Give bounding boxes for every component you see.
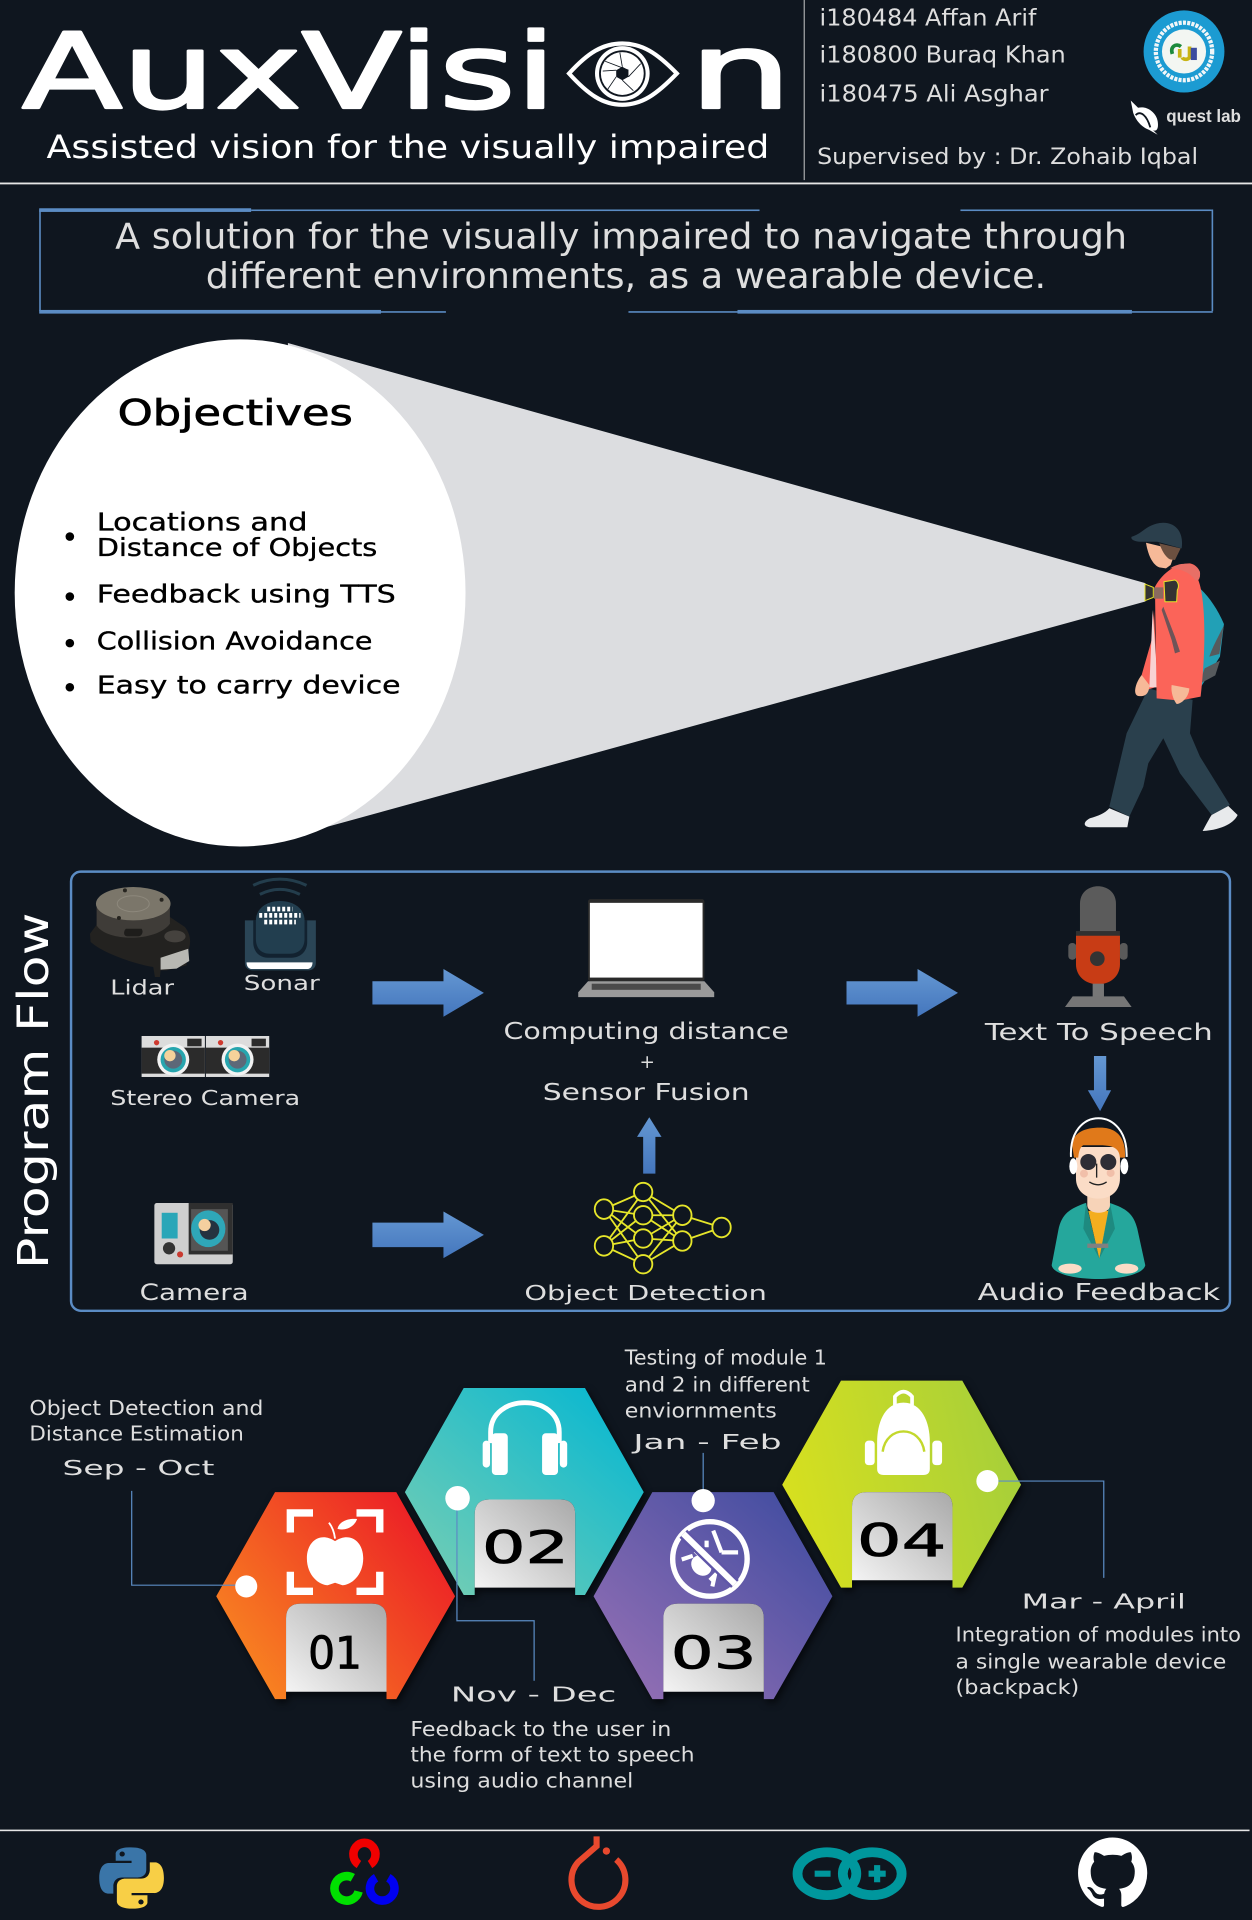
team members [820, 5, 1066, 108]
icon: eye aperture [569, 43, 677, 105]
arrow: text to speech to audio [1088, 1056, 1111, 1111]
computing label: + [639, 1052, 655, 1073]
icon: apple in focus brackets [290, 1513, 380, 1591]
arrow: sensors to computing [372, 969, 484, 1017]
title: AuxVision: n [689, 11, 792, 133]
callout: step 1: Sep - Oct [62, 1456, 214, 1480]
icon: opencv logo [334, 1843, 394, 1901]
step 04 hexagon: 04 [857, 1516, 946, 1567]
callout: step 3: and 2 in different [625, 1373, 810, 1397]
connector lines [132, 1453, 1104, 1681]
objectives list: Easy to carry device [97, 670, 401, 699]
callout: step 3 [624, 1346, 827, 1454]
supervisor: Supervised by : Dr. Zohaib Iqbal [817, 145, 1198, 170]
tagline box [39, 208, 1213, 314]
callout: step 2: the form of text to speech [410, 1743, 695, 1767]
callout: step 4: a single wearable device [956, 1650, 1226, 1673]
Lidar label: Lidar [110, 976, 175, 1000]
icon: neural network [595, 1183, 731, 1273]
team members: i180484 Affan Arif [820, 5, 1037, 32]
step 02 hexagon: 02 [482, 1523, 569, 1574]
Text To Speech label: Text To Speech [984, 1020, 1213, 1046]
vision cone [288, 343, 1145, 834]
icon: sonar [245, 879, 316, 970]
callout: step 2 [410, 1683, 695, 1792]
icon: pytorch logo [571, 1836, 625, 1907]
timeline dots [235, 1470, 998, 1597]
flow frame [71, 872, 1230, 1311]
step 02 hexagon [405, 1388, 644, 1595]
vertical heading: Program Flow [9, 913, 59, 1269]
heading: Objectives [118, 393, 353, 434]
icon: headphones [483, 1403, 567, 1475]
Camera label: Camera [140, 1281, 249, 1306]
step 04 hexagon [782, 1381, 1021, 1588]
Audio Feedback label: Audio Feedback [978, 1280, 1221, 1306]
icon: backpack [865, 1392, 942, 1475]
icon: quest lab mark: quest lab [1166, 106, 1241, 126]
subtitle: Assisted vision for the visually impaired [47, 128, 769, 166]
step 03 hexagon [594, 1492, 832, 1699]
title: AuxVision [22, 11, 792, 133]
objectives ellipse [15, 339, 466, 847]
icon: camera [154, 1203, 233, 1264]
objectives list: Locations and [97, 507, 307, 536]
Sonar label: Sonar [244, 971, 321, 995]
computing label [503, 1019, 789, 1106]
objectives list: Distance of Objects [97, 533, 377, 562]
callout: step 2: using audio channel [410, 1768, 633, 1792]
callout: step 2: Feedback to the user in [410, 1717, 671, 1741]
icon: quest lab mark [1131, 100, 1241, 135]
tagline text [115, 217, 1127, 297]
team members: i180800 Buraq Khan [820, 41, 1066, 68]
icon: listener with headphones [1052, 1118, 1145, 1279]
device on chest [1145, 580, 1178, 602]
tagline text: different environments, as a wearable device. [206, 256, 1046, 297]
arrow: camera to object detection [372, 1212, 484, 1258]
arrow: object detection to fusion [637, 1117, 662, 1174]
team members: i180475 Ali Asghar [820, 81, 1049, 108]
callout: step 2: Nov - Dec [451, 1683, 616, 1707]
icon: python logo [99, 1847, 164, 1909]
icon: microphone [1065, 886, 1132, 1007]
icon: walking person with backpack [1085, 523, 1238, 831]
tagline text: A solution for the visually impaired to navigate through [115, 217, 1127, 258]
icon: no bugs [673, 1522, 747, 1596]
callout: step 4 [956, 1589, 1241, 1699]
header [0, 0, 1252, 184]
icon: github logo [1078, 1838, 1147, 1907]
Stereo Camera label: Stereo Camera [110, 1086, 300, 1110]
icon: laptop [578, 899, 714, 997]
computing label: Sensor Fusion [543, 1080, 750, 1106]
step 03 hexagon: 03 [671, 1629, 756, 1679]
objectives list: Collision Avoidance [97, 626, 372, 655]
step 01 hexagon: 01 [308, 1629, 362, 1679]
arrow: computing to text to speech [847, 969, 958, 1017]
icon: university logo [1144, 10, 1224, 92]
callout: step 1: Object Detection and [29, 1396, 263, 1420]
panel: objectives [15, 339, 1145, 847]
Object Detection label: Object Detection [524, 1281, 767, 1305]
icon: arduino logo [798, 1852, 902, 1895]
callout: step 3: Testing of module 1 [624, 1346, 827, 1370]
callout: step 4: (backpack) [956, 1675, 1079, 1699]
callout: step 4: Mar - April [1022, 1589, 1186, 1613]
footer [0, 1830, 1250, 1909]
callout: step 1: Distance Estimation [29, 1422, 244, 1446]
callout: step 1 [29, 1396, 263, 1480]
objectives list [66, 507, 401, 699]
objectives list: Feedback using TTS [97, 580, 396, 609]
title: AuxVision: AuxVisi [22, 11, 556, 133]
timeline [29, 1346, 1241, 1792]
computing label: Computing distance [503, 1019, 789, 1045]
callout: step 4: Integration of modules into [956, 1623, 1241, 1647]
icon: stereo camera [142, 1036, 269, 1077]
icon: lidar [90, 887, 190, 977]
panel: program flow [9, 872, 1230, 1311]
callout: step 3: enviornments [625, 1398, 777, 1422]
callout: step 3: Jan - Feb [630, 1430, 782, 1454]
step 01 hexagon [216, 1492, 455, 1699]
